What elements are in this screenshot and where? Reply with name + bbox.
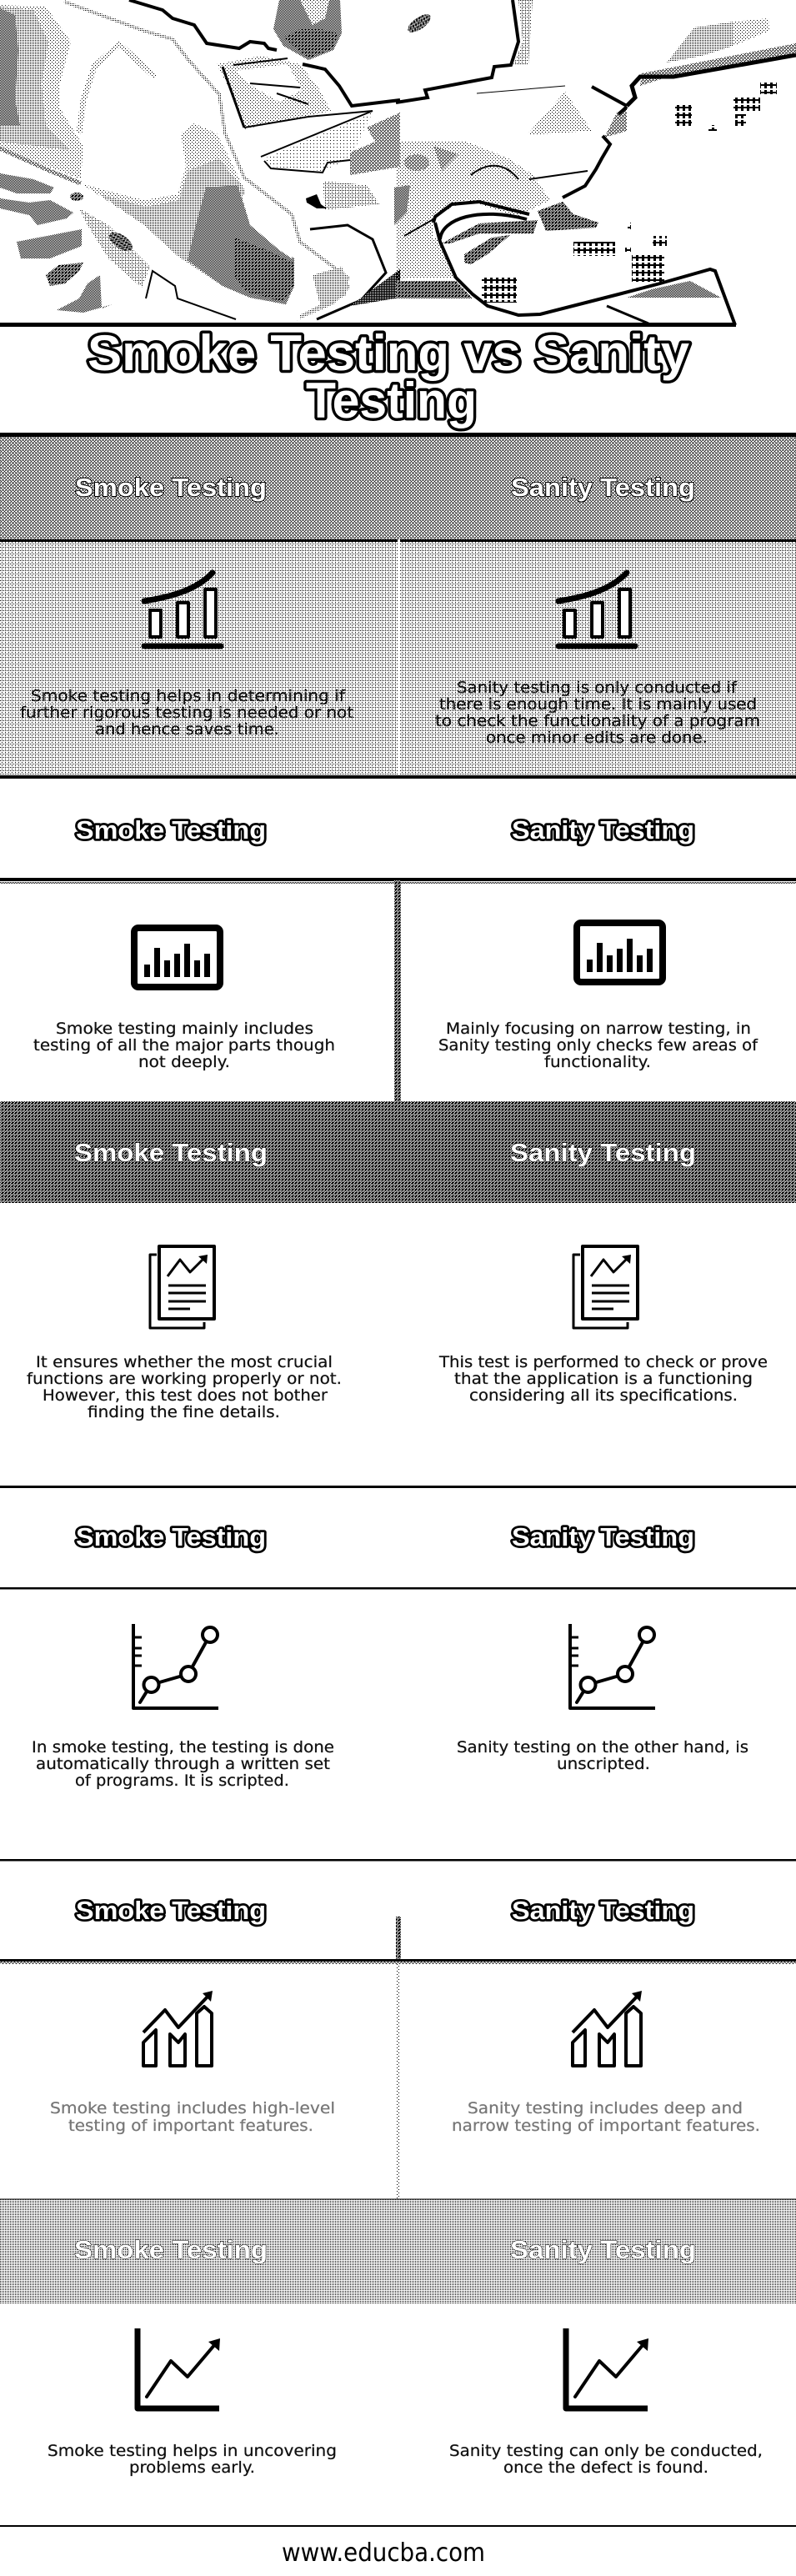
text: smoke testing crucial functions: finding the fine details. [88, 1403, 280, 1421]
text: smoke testing crucial functions [27, 1353, 342, 1421]
text: smoke testing major parts [33, 1020, 335, 1071]
text: smoke testing high-level: Smoke testing includes high-level [50, 2099, 335, 2117]
text: sanity testing unscripted: unscripted. [557, 1755, 650, 1773]
row 1 header band: Sanity Testing [511, 473, 695, 502]
text: smoke testing scripted: In smoke testing, the testing is done [32, 1738, 334, 1757]
text: sanity testing specifications: that the application is a functioning [454, 1370, 753, 1388]
text: sanity testing conditions: Sanity testing is only conducted if [457, 679, 738, 697]
text: sanity testing unscripted [457, 1738, 748, 1773]
text: sanity testing conditions: once minor edits are done. [486, 729, 708, 747]
icon: bars with arrow left [143, 1991, 213, 2066]
text: sanity testing specifications: This test is performed to check or prove [438, 1353, 768, 1371]
row 2 header [0, 815, 796, 884]
title [88, 325, 690, 428]
icon: trend chart right [566, 2328, 648, 2408]
text: sanity testing deep and narrow: narrow testing of important features. [452, 2117, 760, 2135]
icon: bars with arrow right [573, 1991, 642, 2066]
icon: line chart left [133, 1624, 218, 1708]
text: sanity testing narrow: functionality. [544, 1053, 651, 1071]
text: sanity testing after defect: once the defect is found. [503, 2458, 708, 2477]
row 5 header [0, 1896, 796, 1964]
text: smoke testing scripted: of programs. It is scripted. [75, 1772, 289, 1790]
row 5 header: Smoke Testing [76, 1896, 266, 1925]
text: sanity testing unscripted: Sanity testing on the other hand, is [457, 1738, 748, 1757]
text: smoke testing major parts: not deeply. [138, 1053, 230, 1071]
text: smoke testing saves time: Smoke testing helps in determining if [31, 687, 346, 705]
row 6 comparison panel [48, 2328, 763, 2477]
row 3 header band: Sanity Testing [510, 1138, 696, 1167]
text: sanity testing conditions: there is enough time. It is mainly used [439, 695, 757, 714]
title: Testing [306, 373, 477, 428]
text: sanity testing conditions: to check the functionality of a program [435, 712, 760, 730]
text: smoke testing major parts: testing of all the major parts though [33, 1036, 335, 1055]
row 1 header band: Smoke Testing [75, 473, 267, 502]
text: smoke testing major parts: Smoke testing mainly includes [56, 1020, 313, 1038]
hero illustration [0, 0, 796, 327]
title: Smoke Testing vs Sanity [88, 325, 690, 381]
text: smoke testing saves time [20, 687, 353, 739]
text: sanity testing specifications: considering all its specifications. [469, 1386, 738, 1405]
text: sanity testing conditions [435, 679, 760, 747]
text: sanity testing narrow [438, 1020, 758, 1071]
text: smoke testing scripted [32, 1738, 334, 1790]
icon: monitor bars left [134, 928, 220, 987]
row 2 header: Smoke Testing [76, 815, 266, 844]
icon: rising bars left [144, 573, 221, 646]
text: smoke testing saves time: further rigorous testing is needed or not [20, 704, 353, 722]
text: smoke testing crucial functions: functions are working properly or not. [27, 1370, 342, 1388]
text: sanity testing specifications [438, 1353, 768, 1405]
text: sanity testing narrow: Mainly focusing on narrow testing, in [446, 1020, 751, 1038]
icon: report right [573, 1246, 638, 1328]
text: smoke testing early problems: Smoke testing helps in uncovering [48, 2442, 337, 2460]
text: sanity testing after defect: Sanity testing can only be conducted, [449, 2442, 763, 2460]
row 6 header band [0, 2199, 796, 2303]
row 2 comparison panel [33, 880, 758, 1101]
text: smoke testing high-level [50, 2099, 335, 2135]
text: sanity testing narrow: Sanity testing only checks few areas of [438, 1036, 758, 1055]
text: smoke testing early problems [48, 2442, 337, 2477]
text: sanity testing deep and narrow [452, 2099, 760, 2135]
row 3 header band [0, 1101, 796, 1203]
row 4 header [0, 1522, 796, 1589]
row 1 header band [0, 433, 796, 542]
row 4 header: Smoke Testing [76, 1522, 266, 1551]
row 6 header band: Smoke Testing [74, 2235, 268, 2264]
text: smoke testing early problems: problems early. [129, 2458, 255, 2477]
icon: monitor bars right [577, 923, 663, 982]
row 5 comparison panel [50, 1964, 760, 2199]
icon: report left [150, 1246, 214, 1328]
text: smoke testing scripted: automatically through a written set [36, 1755, 330, 1773]
icon: rising bars right [558, 573, 635, 646]
row 3 header band: Smoke Testing [74, 1138, 268, 1167]
icon: trend chart left [138, 2328, 220, 2408]
row 5 header: Sanity Testing [512, 1896, 694, 1925]
row 6 header band: Sanity Testing [510, 2235, 696, 2264]
text: smoke testing saves time: and hence saves time. [95, 720, 279, 739]
icon: line chart right [570, 1624, 655, 1708]
text: sanity testing after defect [449, 2442, 763, 2477]
text: smoke testing crucial functions: However, this test does not bother [43, 1386, 328, 1405]
text: smoke testing crucial functions: It ensures whether the most crucial [36, 1353, 333, 1371]
text: sanity testing deep and narrow: Sanity testing includes deep and [468, 2099, 743, 2117]
text: smoke testing high-level: testing of important features. [68, 2117, 313, 2135]
row 3 comparison panel [27, 1246, 768, 1421]
footer url: www.educba.com [282, 2538, 485, 2568]
row 2 header: Sanity Testing [512, 815, 694, 844]
row 4 comparison panel [32, 1624, 748, 1790]
row 1 comparison panel [0, 542, 796, 775]
row 4 header: Sanity Testing [512, 1522, 694, 1551]
